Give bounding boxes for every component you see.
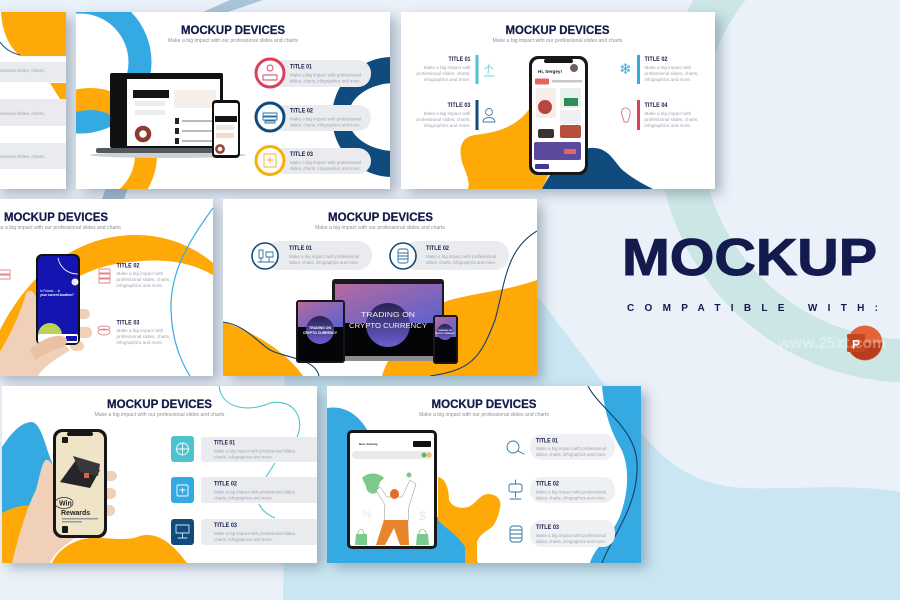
panel: tablet illustration slide [327,386,641,563]
item: title 02 [509,477,615,503]
item: title 03: infographics and more. [116,340,163,345]
item: title 03: TITLE 03 [536,525,560,531]
item: title 02: professional slides, charts, [644,71,699,76]
orange blobs [2,505,187,563]
navy blob [542,148,653,189]
item: title 02: TITLE 02 [426,246,450,252]
item: title 03: professional slides, charts, [116,334,171,339]
tablet mockup [296,300,345,363]
phone mockup: your current location? [40,293,74,297]
item: title 02: professional slides, charts, [116,277,171,282]
orange blob [460,110,548,189]
item: title 01 [252,241,372,270]
item: title 01: TITLE 01 [536,438,559,444]
heading: MOCKUP DEVICES [107,397,212,411]
panel: phone with four titles slide [401,12,715,189]
item: title 03 [416,100,495,130]
compatible with: COMPATIBLE WITH: [627,303,878,314]
phone mockup [53,429,107,538]
item: title 02: TITLE 02 [536,482,560,488]
item: title 03 [256,146,371,174]
item: title 02: charts, infographics and more. [214,496,273,500]
item: title 03: TITLE 03 [116,320,140,326]
item: title 02 [390,241,509,270]
slide shadows [0,17,721,568]
item: title 03 [171,519,321,545]
item: title 03: Make a big impact with professional [536,533,606,538]
item: title 03: Make a big impact with professional slides, [214,531,296,536]
orange shape [1,12,66,56]
phone mockup: Rewards [61,510,90,517]
tablet mockup: TRADING ON [309,326,331,330]
item: title 03: slides, charts, infographics and more. [536,539,606,544]
item: title 02: Make a big impact with professional [426,254,496,259]
item: title 02: slides, charts, infographics and more. [290,122,361,128]
item: title 02: Make a big impact with [644,65,692,70]
hand [12,460,117,563]
item: title 02 [99,264,171,288]
phone mockup [212,100,240,158]
laptop mockup [330,279,446,361]
subtitle: Make a big impact with our professional slides and charts [94,412,225,418]
heading: MOCKUP DEVICES [328,210,433,224]
item: title 03 [98,320,171,345]
item: title 02: Make a big impact with [116,271,164,276]
phone mockup: TRADING ON [438,329,452,332]
phone mockup [433,315,458,364]
item: title 02 [256,103,371,131]
heading: MOCKUP DEVICES [506,23,610,37]
heading: MOCKUP DEVICES [4,210,108,224]
item: title 02: infographics and more. [116,283,163,288]
main title: MOCKUP [622,229,877,287]
item: title 03: infographics and more. [424,123,470,128]
panel: laptop and phone slide [76,12,390,189]
subtitle: Make a big impact with our professional slides and charts [315,225,445,231]
tablet mockup [347,430,437,549]
laptop mockup: TRADING ON [361,310,415,319]
watermark: www.25xt.com [777,335,886,352]
blue blob left [327,407,478,563]
list rows [0,62,66,169]
item: title 02: Make a big impact with professional slides, [214,490,296,494]
laptop mockup [90,73,246,158]
item: title 01: charts, infographics and more. [214,454,273,460]
item: title 04: infographics and more. [644,123,691,128]
tablet mockup: CRYPTO CURRENCY [303,331,338,335]
item: title 03: slides, charts, infographics and more. [290,166,361,171]
icon: powerpoint [847,326,882,360]
item: title 03: professional slides, charts, [416,117,470,122]
item: title 04: Make a big impact with [644,111,692,116]
icon: partial left [0,270,10,279]
panel: trading devices slide [223,199,537,376]
item: title 01: Make a big impact with professional [289,254,359,259]
subtitle: Make a big impact with our professional slides and charts [168,38,298,44]
item: title 03 [510,520,615,547]
item: title 01: TITLE 01 [290,64,313,70]
item: title 02: TITLE 02 [290,108,314,114]
phone mockup: CRYPTO CURRENCY [435,333,456,335]
orange blob [438,477,500,563]
hand [0,291,92,376]
phone mockup: Is Poland ... is [40,289,60,293]
item: title 01: Make a big impact with professional [290,72,361,78]
item: title 03: Make a big impact with professional [290,160,361,165]
teal line [219,386,300,518]
decorative rings [76,12,390,189]
subtitle: Make a big impact with our professional slides and charts [419,412,549,418]
item: title 01: Make a big impact with [424,65,471,70]
panel: cropped slide left [0,12,66,189]
item: title 01 [256,59,371,87]
phone mockup [36,254,80,347]
orange shapes [223,280,537,376]
item: title 02: TITLE 02 [644,57,668,63]
item: title 01: slides, charts, infographics and more. [290,78,361,84]
item: title 02: infographics and more. [644,77,691,82]
item: title 03: TITLE 03 [290,152,314,158]
heading: MOCKUP DEVICES [432,397,536,411]
item: title 01: TITLE 01 [214,440,236,446]
item: title 02: Make a big impact with professional [290,116,361,122]
item: title 02: Make a big impact with professional [536,490,606,494]
tablet mockup: New drawing [359,442,378,446]
item: title 01: slides, charts, infographics and more. [289,260,359,265]
panel: win rewards slide [2,386,321,563]
subtitle: Make a big impact with our professional slides and charts [492,38,623,44]
item: title 02: ❄ [619,60,632,78]
laptop mockup: CRYPTO CURRENCY [349,321,427,330]
heading: MOCKUP DEVICES [181,23,285,37]
item: title 01: slides, charts, infographics and more. [536,452,606,457]
illustration: person with shirt: $ [419,509,426,523]
item: title 02: TITLE 02 [214,482,238,488]
item: title 01: Make a big impact with professional slides, [214,448,296,454]
phone mockup: Hi, Sergey! [538,69,562,74]
item: title 01: infographics and more. [424,77,470,82]
item: title 02 [619,55,699,84]
item: title 01: TITLE 01 [448,57,471,63]
illustration: person with shirt: % [362,509,372,521]
navy line [588,386,637,563]
blue blob [2,422,60,520]
panel: hand holding phone slide [0,199,213,376]
item: title 01: Make a big impact with professional [536,446,606,451]
navy lines [223,231,537,376]
icon: powerpoint: P [852,338,860,352]
blue shape right [590,386,641,563]
item: title 03: Make a big impact with [424,111,471,116]
blue line [171,208,213,376]
item: title 02: slides, charts, infographics and more. [536,496,606,500]
item: title 02: TITLE 02 [116,264,140,270]
item: title 01 [507,434,615,460]
item: title 03: TITLE 03 [448,103,471,109]
orange arc [0,235,213,352]
thumb [30,336,67,360]
item: title 01: TITLE 01 [289,246,313,252]
item: title 02: slides, charts, infographics and more. [426,260,496,265]
illustration: person with shirt [355,472,429,545]
phone mockup [529,56,588,175]
item: title 03: Make a big impact with [116,328,164,333]
item: title 02 [171,477,321,503]
item: title 01 [416,55,494,84]
item: title 01: professional slides, charts, [416,71,470,76]
phone mockup: Win [59,500,72,508]
item: title 03: charts, infographics and more. [214,537,273,542]
item: title 04 [621,100,699,130]
item: title 03: TITLE 03 [214,523,238,529]
item: title 01 [171,436,321,462]
item: title 04: professional slides, charts, [644,117,699,122]
item: title 04: TITLE 04 [644,103,668,109]
